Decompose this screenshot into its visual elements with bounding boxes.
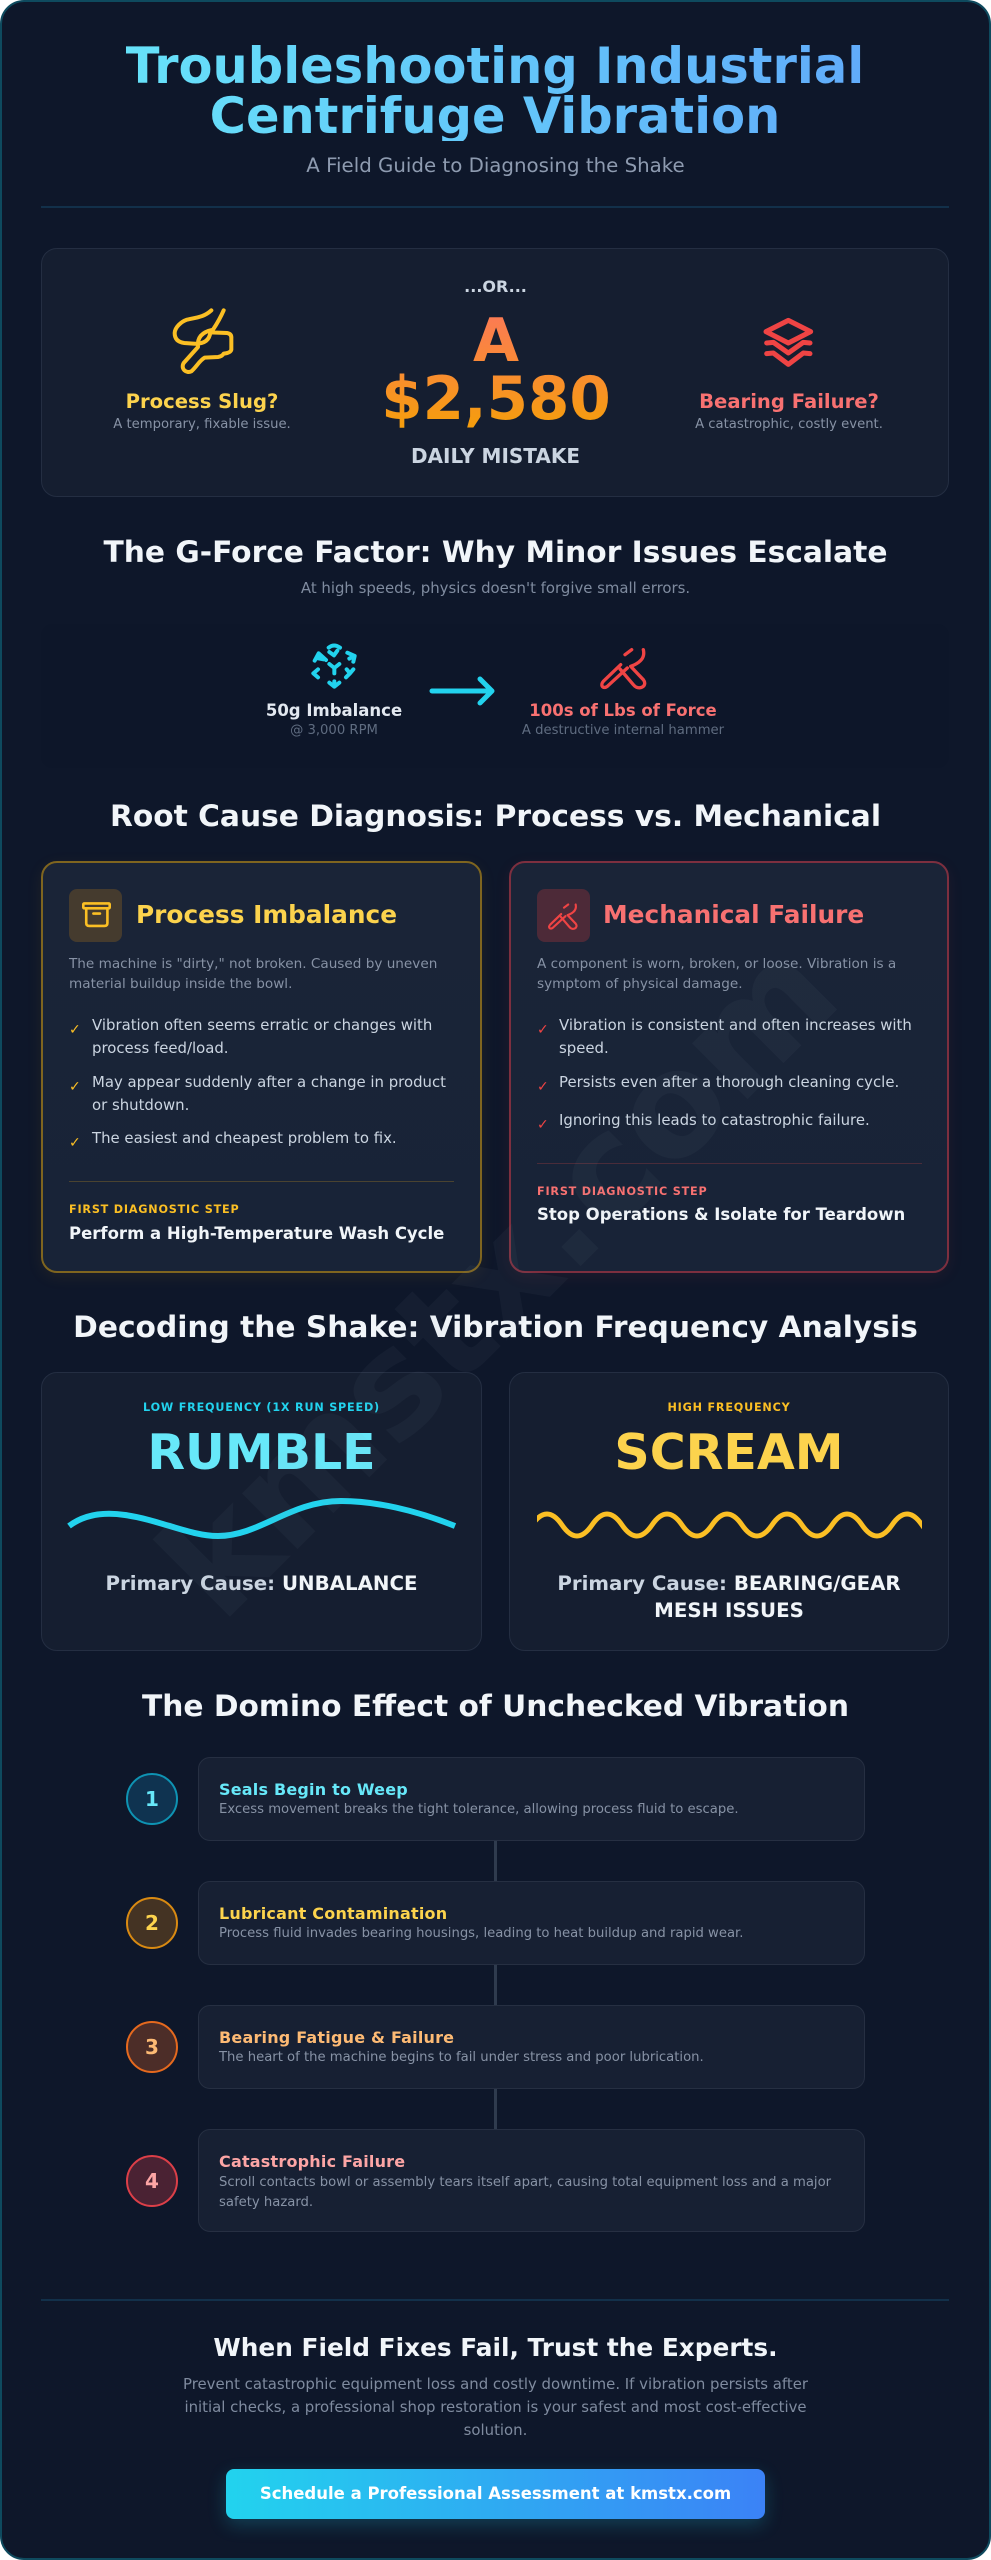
mechanical icon box bbox=[537, 889, 590, 942]
footer heading: When Field Fixes Fail, Trust the Experts. bbox=[213, 2333, 778, 2362]
process icon box bbox=[69, 889, 122, 942]
step 4 number bbox=[126, 2155, 178, 2207]
bullet 1 bbox=[559, 1016, 912, 1057]
call to action button: Schedule a Professional Assessment at kmstx.com bbox=[260, 2484, 731, 2503]
step 2 number: 2 bbox=[145, 1911, 159, 1935]
icon: archive box bbox=[82, 902, 111, 928]
scream cause: Primary Cause: BEARING/GEAR bbox=[557, 1572, 901, 1595]
rumble wave bbox=[67, 1498, 456, 1539]
heading: domino: The Domino Effect of Unchecked Vibration bbox=[142, 1689, 849, 1724]
panel: g-force bbox=[41, 624, 949, 768]
title: Troubleshooting Industrial bbox=[126, 37, 864, 95]
bullet 1: Vibration often seems erratic or changes with bbox=[92, 1016, 432, 1034]
daily mistake label: DAILY MISTAKE bbox=[411, 444, 580, 468]
step 1 card bbox=[198, 1757, 865, 1841]
process description: material buildup inside the bowl. bbox=[69, 976, 292, 992]
force note: A destructive internal hammer bbox=[522, 723, 724, 738]
step 4 text bbox=[219, 2175, 832, 2210]
panel: mechanical failure bbox=[509, 861, 949, 1273]
step 3 number: 3 bbox=[145, 2035, 159, 2059]
rumble word: RUMBLE bbox=[147, 1424, 376, 1481]
bullet 1: speed. bbox=[559, 1039, 609, 1057]
subtitle: A Field Guide to Diagnosing the Shake bbox=[306, 154, 685, 177]
footer text: initial checks, a professional shop restoration is your safest and most cost-effective bbox=[184, 2398, 807, 2416]
heading: root cause: Root Cause Diagnosis: Process vs. Mechanical bbox=[110, 799, 881, 834]
check 3: ✓ bbox=[69, 1135, 81, 1151]
step 1 number: 1 bbox=[145, 1787, 159, 1811]
watermark: kmstx.com bbox=[127, 907, 869, 1649]
step 4 text: safety hazard. bbox=[219, 2195, 313, 2210]
process title: Process Imbalance bbox=[136, 900, 397, 929]
step 4 card bbox=[198, 2129, 865, 2232]
bullet 3: The easiest and cheapest problem to fix. bbox=[92, 1129, 397, 1147]
force label: 100s of Lbs of Force bbox=[529, 701, 717, 720]
process slug label: Process Slug? bbox=[126, 390, 278, 413]
scream word: SCREAM bbox=[614, 1424, 844, 1481]
step 2 text: Process fluid invades bearing housings, leading to heat buildup and rapid wear. bbox=[219, 1926, 743, 1941]
scream wave bbox=[537, 1512, 922, 1538]
call to action button bbox=[226, 2469, 765, 2519]
step 1 title: Seals Begin to Weep bbox=[219, 1780, 408, 1799]
step 3 text: The heart of the machine begins to fail under stress and poor lubrication. bbox=[219, 2050, 704, 2065]
footer text: solution. bbox=[464, 2421, 527, 2439]
panel: rumble bbox=[41, 1372, 482, 1651]
step 4 title: Catastrophic Failure bbox=[219, 2152, 405, 2171]
process description bbox=[68, 956, 437, 992]
imbalance label: 50g Imbalance bbox=[266, 701, 402, 720]
step 3 card bbox=[198, 2005, 865, 2089]
icon: process slug bbox=[172, 308, 234, 374]
big number: $2,580 bbox=[381, 365, 611, 434]
mechanical description bbox=[537, 956, 896, 992]
bullet 2: Persists even after a thorough cleaning cycle. bbox=[559, 1073, 899, 1091]
arrow bbox=[430, 676, 494, 706]
check 2: ✓ bbox=[69, 1079, 81, 1095]
bullet 1: process feed/load. bbox=[92, 1039, 229, 1057]
step 4 number: 4 bbox=[145, 2169, 159, 2193]
footer text: Prevent catastrophic equipment loss and costly downtime. If vibration persists after bbox=[183, 2375, 808, 2393]
step 2 title: Lubricant Contamination bbox=[219, 1904, 447, 1923]
or label: ...OR... bbox=[464, 277, 527, 296]
step 4 text: Scroll contacts bowl or assembly tears itself apart, causing total equipment loss and a major bbox=[219, 2175, 831, 2190]
step 3 title: Bearing Fatigue & Failure bbox=[219, 2028, 454, 2047]
bullet 3: Ignoring this leads to catastrophic failure. bbox=[559, 1111, 870, 1129]
icon: wrench bbox=[548, 903, 578, 930]
title bbox=[41, 41, 949, 141]
mechanical description: symptom of physical damage. bbox=[537, 976, 743, 992]
title: Centrifuge Vibration bbox=[210, 87, 780, 145]
mechanical title: Mechanical Failure bbox=[603, 900, 864, 929]
scream cause: MESH ISSUES bbox=[654, 1599, 804, 1622]
imbalance note: @ 3,000 RPM bbox=[290, 723, 378, 738]
big number bbox=[296, 313, 696, 429]
bullet 2: or shutdown. bbox=[92, 1096, 189, 1114]
heading: g-force: The G-Force Factor: Why Minor Issues Escalate bbox=[104, 535, 887, 570]
panel: hook bbox=[41, 248, 949, 497]
step 1 number bbox=[126, 1773, 178, 1825]
check 3: ✓ bbox=[537, 1117, 549, 1133]
mechanical step label: FIRST DIAGNOSTIC STEP bbox=[537, 1185, 707, 1198]
bullet 2: May appear suddenly after a change in product bbox=[92, 1073, 446, 1091]
rumble label: LOW FREQUENCY (1X RUN SPEED) bbox=[143, 1401, 380, 1414]
process slug note: A temporary, fixable issue. bbox=[113, 417, 291, 432]
g-force subtitle: At high speeds, physics doesn't forgive small errors. bbox=[301, 579, 690, 597]
process step label: FIRST DIAGNOSTIC STEP bbox=[69, 1203, 239, 1216]
process description: The machine is "dirty," not broken. Caused by uneven bbox=[69, 956, 437, 972]
scream label: HIGH FREQUENCY bbox=[668, 1401, 790, 1414]
step 1 text: Excess movement breaks the tight tolerance, allowing process fluid to escape. bbox=[219, 1802, 739, 1817]
icon: bearing failure bbox=[764, 318, 814, 367]
panel: process imbalance bbox=[41, 861, 482, 1273]
mechanical description: A component is worn, broken, or loose. Vibration is a bbox=[537, 956, 896, 972]
step 3 number bbox=[126, 2021, 178, 2073]
heading: frequency: Decoding the Shake: Vibration Frequency Analysis bbox=[73, 1310, 918, 1345]
check 1: ✓ bbox=[537, 1022, 549, 1038]
check 1: ✓ bbox=[69, 1022, 81, 1038]
scream cause bbox=[557, 1572, 901, 1622]
bearing failure note: A catastrophic, costly event. bbox=[695, 417, 883, 432]
bullet 2 bbox=[92, 1073, 446, 1114]
icon: wrench hammer bbox=[600, 648, 646, 690]
big number: A bbox=[473, 307, 519, 376]
panel: scream bbox=[509, 1372, 949, 1651]
icon: imbalance cube bbox=[311, 644, 357, 689]
step 2 number bbox=[126, 1897, 178, 1949]
bullet 1: Vibration is consistent and often increases with bbox=[559, 1016, 912, 1034]
step 2 card bbox=[198, 1881, 865, 1965]
process step action: Perform a High-Temperature Wash Cycle bbox=[69, 1224, 444, 1243]
bullet 1 bbox=[92, 1016, 432, 1057]
rumble cause: Primary Cause: UNBALANCE bbox=[106, 1572, 417, 1595]
footer text bbox=[183, 2375, 808, 2439]
bearing failure label: Bearing Failure? bbox=[699, 390, 879, 413]
mechanical step action: Stop Operations & Isolate for Teardown bbox=[537, 1205, 905, 1224]
check 2: ✓ bbox=[537, 1079, 549, 1095]
